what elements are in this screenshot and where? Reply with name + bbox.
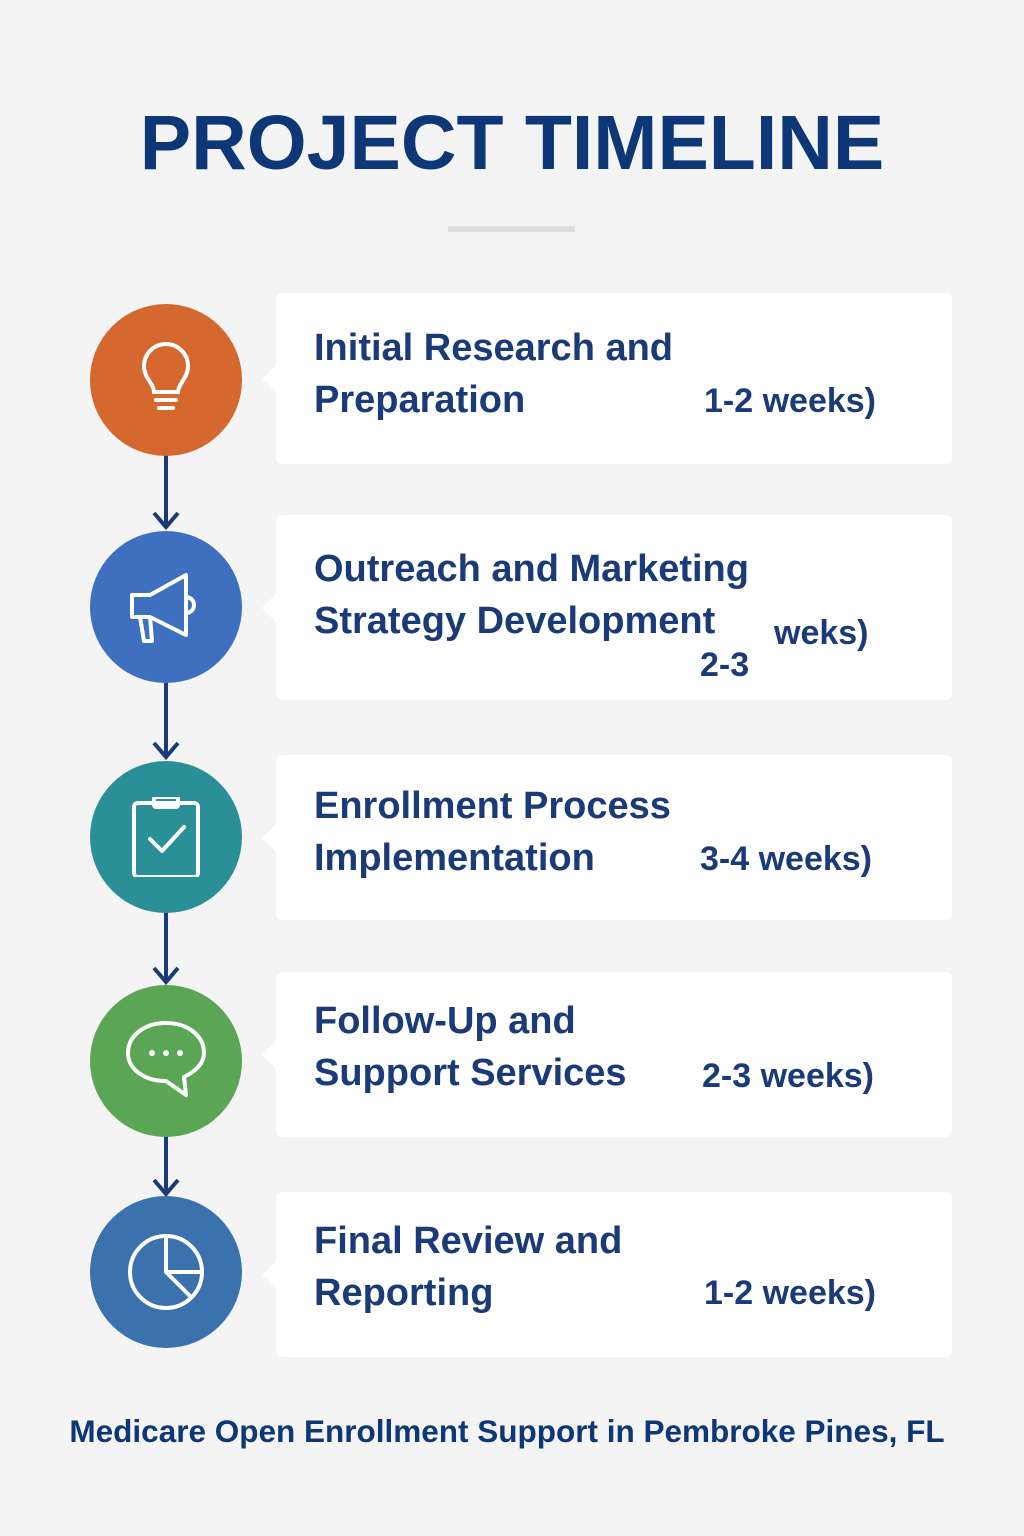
card: phase 1: Initial Research and bbox=[314, 327, 673, 369]
card: phase 4: Follow-Up and bbox=[314, 1000, 576, 1042]
icon: pie chart circle bbox=[90, 1196, 242, 1348]
card: phase 2 bbox=[276, 515, 952, 700]
connector arrows bbox=[152, 456, 180, 1196]
card: phase 5: 1-2 weeks) bbox=[704, 1274, 876, 1312]
card: phase 3: 3-4 weeks) bbox=[700, 840, 872, 878]
icon: chat circle bbox=[90, 985, 242, 1137]
footer: Medicare Open Enrollment Support in Pembroke Pines, FL bbox=[69, 1413, 945, 1449]
card: phase 2: weks) bbox=[774, 614, 868, 652]
card: phase 1 bbox=[276, 293, 952, 464]
icon: clipboard circle bbox=[90, 761, 242, 913]
card: phase 4: 2-3 weeks) bbox=[702, 1057, 874, 1095]
icon: lightbulb circle bbox=[90, 304, 242, 456]
card: phase 3 bbox=[276, 755, 952, 920]
card: phase 2: Strategy Development bbox=[314, 600, 715, 642]
card: phase 2: Outreach and Marketing bbox=[314, 548, 749, 590]
card: phase 3: Implementation bbox=[314, 837, 595, 879]
card: phase 4 bbox=[276, 972, 952, 1137]
icon: megaphone circle bbox=[90, 531, 242, 683]
card: phase 5: Reporting bbox=[314, 1272, 493, 1314]
card: phase 3: Enrollment Process bbox=[314, 785, 671, 827]
card: phase 1: Preparation bbox=[314, 379, 525, 421]
card: phase 4: Support Services bbox=[314, 1052, 627, 1094]
card: phase 2: 2-3 bbox=[700, 646, 749, 684]
card: phase 1: 1-2 weeks) bbox=[704, 382, 876, 420]
title: PROJECT TIMELINE bbox=[140, 100, 884, 186]
card: phase 5 bbox=[276, 1192, 952, 1357]
card: phase 5: Final Review and bbox=[314, 1220, 622, 1262]
